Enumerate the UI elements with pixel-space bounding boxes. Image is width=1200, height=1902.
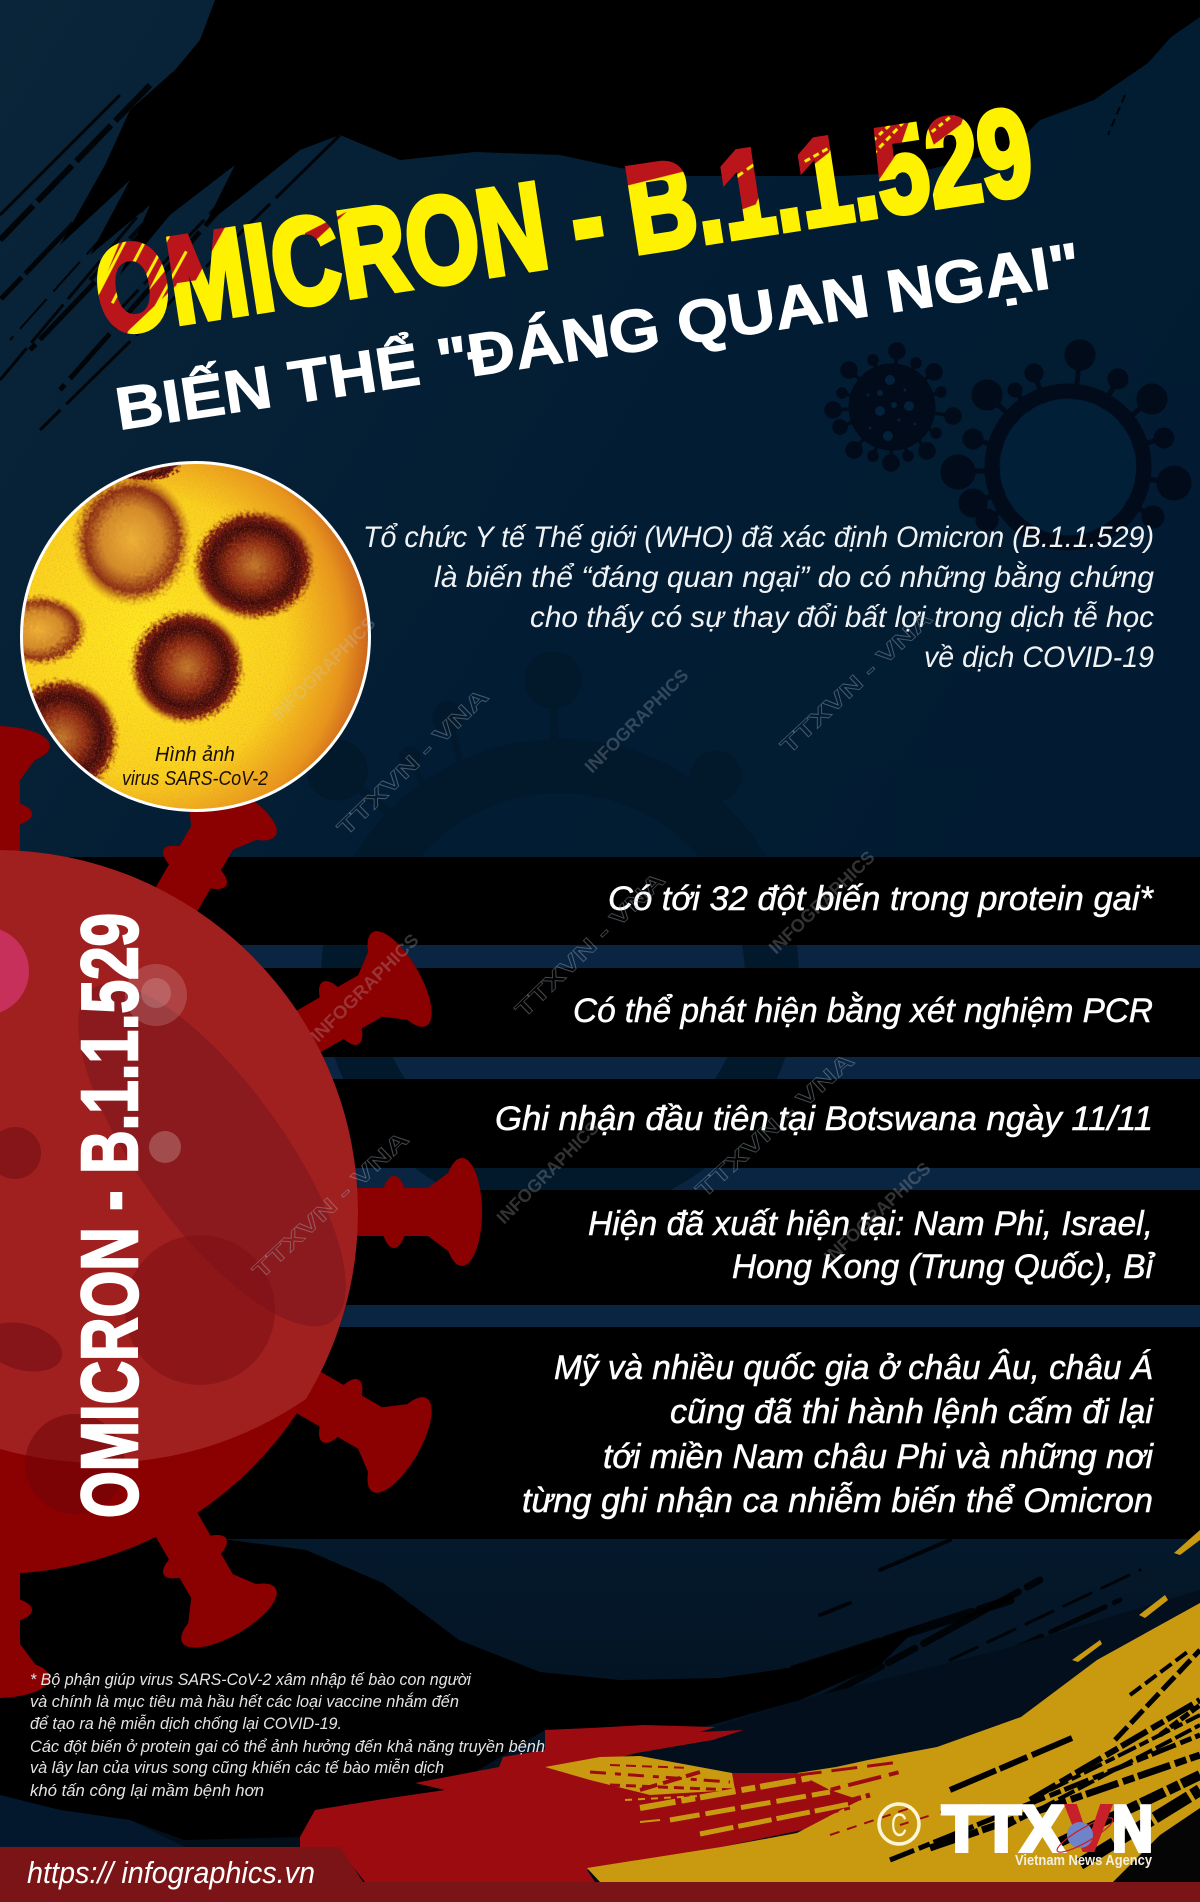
watermarks: TTXVN - VNA (332, 684, 493, 841)
subtitle: BIẾN THỂ "ĐÁNG QUAN NGẠI" (111, 230, 1085, 443)
photo: SARS-CoV-2 micrograph (20, 461, 371, 812)
TTXVN logo: N (1112, 1792, 1153, 1865)
TTXVN logo: TTX (942, 1792, 1064, 1865)
photo caption (122, 744, 268, 790)
row: present in (588, 1205, 1155, 1286)
TTXVN logo (942, 1791, 1153, 1869)
row: PCR: Có thể phát hiện bằng xét nghiệm PCR (573, 992, 1153, 1030)
watermarks: INFOGRAPHICS (765, 847, 879, 958)
small virus icon (826, 344, 960, 470)
virus spikes (0, 726, 482, 1698)
footnote: và lây lan của virus song cũng khiến các tế bào miễn dịch (30, 1758, 444, 1777)
red brush (300, 1725, 860, 1882)
black info rows (0, 857, 1200, 1539)
row: first recorded: Ghi nhận đầu tiên tại Botswana ngày 11/11 (495, 1100, 1153, 1138)
large red virus body (0, 850, 358, 1574)
watermarks: TTXVN - VNA (247, 1126, 414, 1284)
TTXVN logo: V (1065, 1791, 1112, 1866)
row: mutations: Có tới 32 đột biến trong protein gai* (608, 880, 1155, 918)
watermarks: INFOGRAPHICS (581, 665, 692, 777)
row: travel bans (522, 1349, 1154, 1520)
intro paragraph: Tổ chức Y tế Thế giới (WHO) đã xác định Omicron (B.1.1.529) (363, 521, 1154, 554)
row: travel bans: tới miền Nam châu Phi và những nơi (603, 1438, 1154, 1476)
watermarks (247, 605, 937, 1284)
watermarks: TTXVN - VNA (691, 1048, 859, 1203)
footnote: để tạo ra hệ miễn dịch chống lại COVID-19. (30, 1714, 342, 1733)
photo caption: virus SARS-CoV-2 (122, 768, 268, 790)
dark wedge above gold (610, 1590, 1200, 1773)
agency name: Vietnam News Agency (1015, 1852, 1153, 1869)
watermarks: INFOGRAPHICS (820, 1158, 935, 1267)
faint large virus background (307, 652, 772, 1190)
row: present in: Hong Kong (Trung Quốc), Bỉ (732, 1248, 1155, 1286)
intro paragraph: là biến thể “đáng quan ngại” do có những bằng chứng (434, 561, 1154, 594)
footnote (30, 1670, 545, 1800)
footnote: * Bộ phận giúp virus SARS-CoV-2 xâm nhập tế bào con người (30, 1670, 472, 1689)
footnote: và chính là mục tiêu mà hầu hết các loại vaccine nhắm đến (30, 1692, 459, 1711)
vertical virus label: OMICRON - B.1.1.529 (65, 913, 154, 1518)
watermarks: INFOGRAPHICS (268, 613, 379, 725)
gold brush (587, 1603, 1200, 1882)
footnote: khó tấn công lại mầm bệnh hơn (30, 1781, 264, 1800)
intro paragraph: về dịch COVID-19 (924, 641, 1154, 674)
intro paragraph: cho thấy có sự thay đổi bất lợi trong dịch tễ học (530, 601, 1154, 634)
row: present in: Hiện đã xuất hiện tại: Nam Phi, Israel, (588, 1205, 1153, 1243)
bottom brush strokes (0, 1530, 1200, 1882)
footer bar (0, 1847, 1200, 1902)
row: travel bans: Mỹ và nhiều quốc gia ở châu Âu, châu Á (554, 1349, 1153, 1387)
website url: https:// infographics.vn (27, 1855, 315, 1890)
watermarks: INFOGRAPHICS (493, 1118, 603, 1228)
watermarks: TTXVN - VNA (775, 605, 937, 759)
row: travel bans: từng ghi nhận ca nhiễm biến thể Omicron (522, 1482, 1153, 1520)
top black brush stroke (0, 0, 1200, 430)
watermarks: INFOGRAPHICS (307, 930, 423, 1046)
watermarks: TTXVN - VNA (510, 867, 670, 1023)
ring virus icon (943, 342, 1189, 543)
copyright symbol: C (891, 1807, 907, 1843)
copyright symbol (879, 1804, 919, 1844)
intro paragraph (363, 521, 1154, 674)
row: travel bans: cũng đã thi hành lệnh cấm đi lại (670, 1393, 1154, 1431)
photo caption: Hình ảnh (155, 744, 235, 766)
blue stripes behind the rows (0, 940, 1200, 1340)
footnote: Các đột biến ở protein gai có thể ảnh hưởng đến khả năng truyền bệnh (30, 1737, 545, 1756)
